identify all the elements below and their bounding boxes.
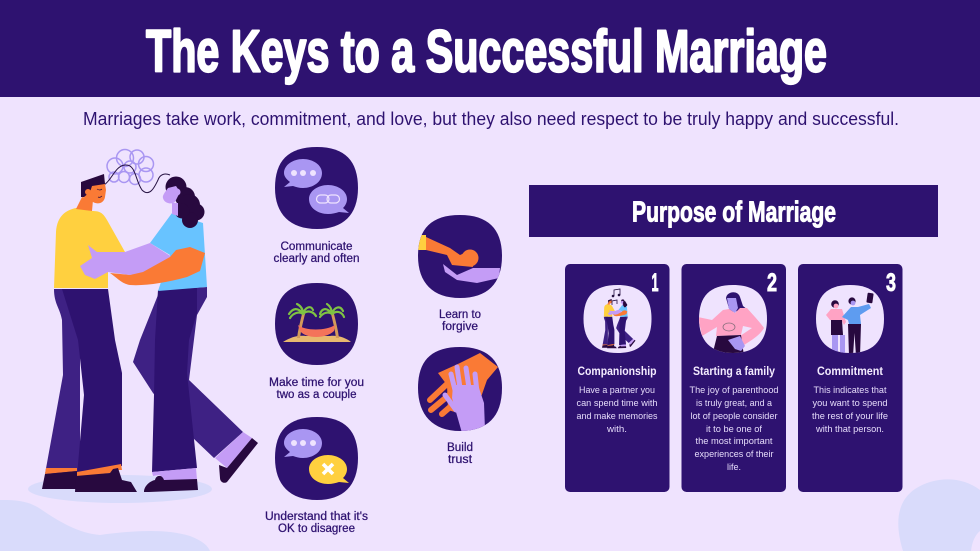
woman back leg: [133, 287, 243, 458]
woman torso: [150, 213, 207, 291]
illustration: couple taking selfie: [816, 285, 884, 356]
label: communicate: clearly and often: [274, 253, 360, 265]
number 2: 2: [767, 269, 777, 297]
card body: it to be one of: [706, 424, 762, 435]
illustration: pregnant woman: [698, 285, 767, 356]
card title: Companionship: [578, 366, 656, 378]
card body: is truly great, and a: [696, 398, 773, 409]
card body: with.: [606, 424, 627, 435]
panel: commitment: [798, 264, 902, 492]
label: disagree: [265, 511, 368, 535]
card body: lot of people consider: [690, 411, 778, 422]
panel: starting a family: [682, 264, 786, 492]
man torso: [54, 208, 125, 288]
background blob: bottom right: [898, 479, 980, 551]
icon: forgiving hands: [418, 215, 502, 298]
man front leg: [62, 289, 122, 476]
label: disagree: Understand that it's: [265, 511, 368, 523]
illustration: dancing couple: [584, 285, 652, 353]
card body: with that person.: [815, 424, 884, 435]
icon: communicate bubbles: [275, 147, 358, 229]
panel: companionship: [565, 264, 670, 492]
card title: Commitment: [817, 366, 883, 378]
label: make time: [269, 377, 364, 401]
label: communicate: [274, 241, 360, 265]
card title: Starting a family: [693, 366, 776, 378]
arms: [80, 243, 172, 279]
number 1: 1: [652, 269, 659, 297]
subtitle: Marriages take work, commitment, and love, but they also need respect to be truly happy and successful.: [83, 109, 899, 129]
ground shadow: [28, 475, 212, 503]
card body: and make memories: [576, 411, 658, 422]
label: communicate: Communicate: [280, 241, 352, 253]
label: make time: Make time for you: [269, 377, 364, 389]
card body: Have a partner you: [579, 385, 655, 396]
header banner: [0, 0, 980, 97]
card body: [576, 385, 658, 435]
label: disagree: OK to disagree: [278, 523, 355, 535]
card body: [812, 385, 888, 435]
connecting line: [104, 165, 170, 193]
card body: experiences of their: [694, 449, 774, 460]
label: trust: [447, 442, 473, 466]
label: forgive: forgive: [442, 321, 478, 333]
label: trust: trust: [448, 454, 473, 466]
background blob: bottom left: [0, 500, 210, 551]
card body: This indicates that: [814, 385, 887, 396]
card body: you want to spend: [812, 398, 888, 409]
woman front leg: [152, 288, 197, 472]
label: forgive: Learn to: [439, 309, 481, 321]
icon: trusting hands: [418, 347, 502, 433]
label: trust: Build: [447, 442, 473, 454]
card body: can spend time with: [576, 398, 658, 409]
card body: The joy of parenthood: [690, 385, 778, 396]
section heading: purpose of marriage: Purpose of Marriage: [632, 196, 836, 228]
card body: the most important: [696, 436, 773, 447]
number 3: 3: [886, 269, 896, 297]
section heading: purpose of marriage: [529, 185, 938, 237]
icon: disagree bubbles: [275, 417, 358, 500]
man back leg: [45, 289, 80, 474]
card body: [690, 385, 778, 473]
card body: life.: [727, 462, 741, 473]
label: make time: two as a couple: [276, 389, 356, 401]
tangled thought scribble: [107, 150, 154, 184]
card body: the rest of your life: [812, 411, 888, 422]
illustration: embracing couple: [42, 174, 258, 492]
label: forgive: [439, 309, 481, 333]
icon: hammock and palms: [275, 283, 358, 365]
